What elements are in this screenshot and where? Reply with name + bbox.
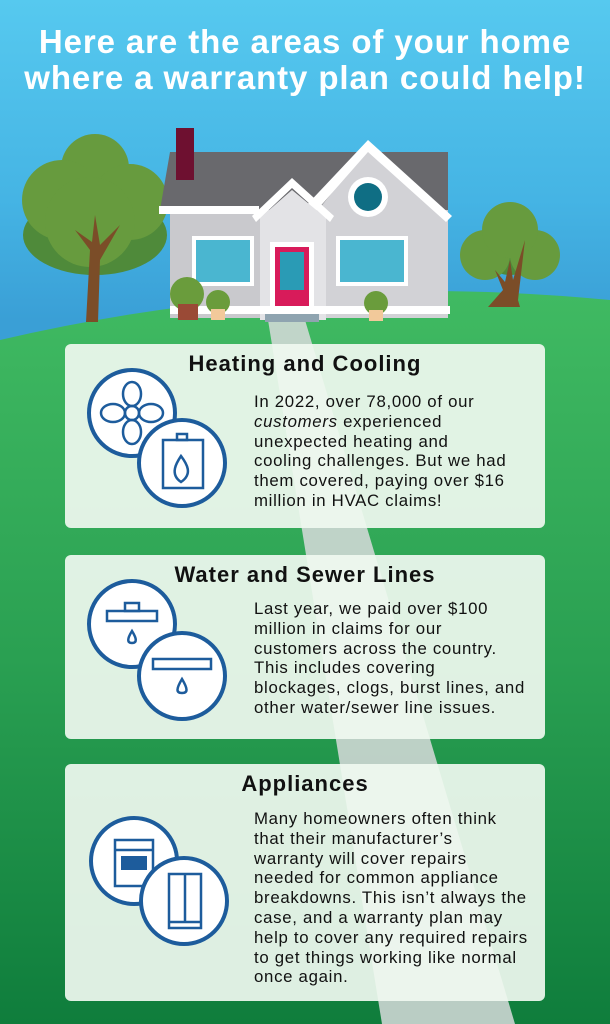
icon: fridge	[139, 856, 229, 946]
title	[24, 23, 586, 96]
text: that their manufacturer’s	[254, 829, 453, 848]
text: other water/sewer line issues.	[254, 698, 496, 717]
tree left	[22, 134, 168, 322]
text: customers experienced	[254, 412, 442, 431]
text: to get things working like normal	[254, 948, 517, 967]
icon: oven	[89, 816, 179, 906]
text	[254, 599, 525, 717]
title: where a warranty plan could help!	[24, 59, 586, 96]
text: breakdowns. This isn’t always the	[254, 888, 527, 907]
text: million in HVAC claims!	[254, 491, 442, 510]
tree right	[460, 202, 560, 307]
heading: Water and Sewer Lines	[174, 562, 436, 587]
text: This includes covering	[254, 658, 435, 677]
icon: furnace	[137, 418, 227, 508]
heading: Heating and Cooling	[189, 351, 421, 376]
text: them covered, paying over $16	[254, 471, 505, 490]
text	[254, 809, 528, 986]
scene: house and trees	[22, 128, 560, 322]
text: once again.	[254, 967, 348, 986]
text: unexpected heating and	[254, 432, 449, 451]
text	[254, 392, 506, 510]
icon: pipe with drop	[137, 631, 227, 721]
icon: pipe	[87, 579, 177, 669]
text: blockages, clogs, burst lines, and	[254, 678, 525, 697]
text: customers across the country.	[254, 639, 497, 658]
text: cooling challenges. But we had	[254, 451, 506, 470]
text: In 2022, over 78,000 of our	[254, 392, 474, 411]
text: Last year, we paid over $100	[254, 599, 488, 618]
heading: Appliances	[241, 771, 369, 796]
text: needed for common appliance	[254, 868, 499, 887]
text: case, and a warranty plan may	[254, 908, 503, 927]
text: help to cover any required repairs	[254, 928, 528, 947]
panel: heating and cooling	[65, 344, 545, 528]
icon: fan	[87, 368, 177, 458]
title: Here are the areas of your home	[39, 23, 571, 60]
text: warranty will cover repairs	[254, 849, 467, 868]
text: Many homeowners often think	[254, 809, 497, 828]
text: million in claims for our	[254, 619, 442, 638]
house	[159, 128, 452, 322]
panel: appliances	[65, 764, 545, 1001]
panel: water and sewer	[65, 555, 545, 739]
